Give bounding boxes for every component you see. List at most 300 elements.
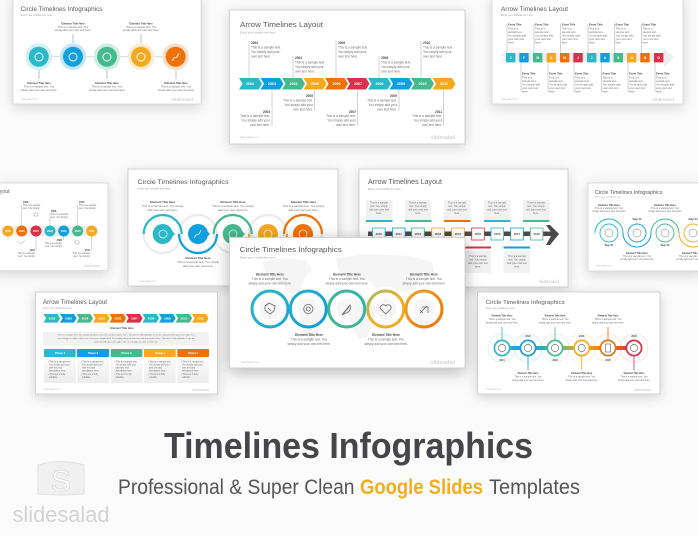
note text above: add your own text — [526, 208, 546, 212]
events below: You simply add — [602, 82, 621, 86]
subtitle: Enter your subtitle line here — [43, 307, 73, 310]
events above: here. — [535, 40, 541, 44]
events below: This is a — [575, 76, 586, 80]
phase lists: • This text is fully — [81, 373, 99, 376]
step labels: Step 03 — [661, 244, 670, 247]
events below: You simply add — [522, 82, 541, 86]
step labels: simply add your own text here — [620, 258, 654, 261]
events above: sample text. — [589, 30, 604, 34]
month tiles: N — [644, 56, 647, 60]
ribbon labels: This is a sample text. You simply — [177, 260, 219, 264]
year tiles: 2013 — [435, 232, 442, 236]
phase lists: editable. — [149, 376, 158, 379]
element labels: Element Title Here — [333, 272, 361, 276]
events above: here. — [642, 40, 649, 44]
events above: sample text. — [642, 30, 657, 34]
ribbon labels: This is a sample text. You simply — [142, 204, 184, 208]
ribbon labels: This is a sample text. You simply — [283, 204, 325, 208]
year notes: 2006 — [23, 201, 29, 204]
node labels: Element Title Here — [518, 372, 539, 375]
phase lists: You simply add your — [182, 364, 203, 366]
labels: Element Title Here — [129, 22, 153, 26]
watermark: slidesalad — [84, 264, 100, 268]
note boxes below — [465, 246, 530, 273]
year notes: 2010 — [79, 201, 85, 204]
callouts below: This is a sample text. — [412, 114, 442, 118]
ribbon labels: add your own text here. — [183, 264, 213, 268]
icon discs — [260, 298, 434, 320]
events below: your own text — [602, 86, 619, 90]
events below: Event Title — [629, 72, 643, 76]
description box: This is a sample text. You simply add your own text and description here. This text is fully editable. It can be replaced with your own style. You — [58, 334, 195, 336]
watermark: slidesalad — [634, 388, 651, 392]
callouts below: You simply add your — [368, 103, 398, 107]
element labels — [248, 272, 446, 346]
subtitle: Enter your subtitle line here — [240, 256, 276, 260]
phase lists: description here. — [82, 370, 99, 372]
events below: You simply add — [575, 82, 594, 86]
phase lists: description here. — [49, 370, 66, 372]
title: Timelines Infographics — [164, 425, 533, 466]
stems — [502, 327, 634, 370]
labels — [21, 22, 194, 92]
events below: your own text — [549, 86, 565, 90]
chevron years — [44, 314, 209, 323]
panel: arrow phases slide lower left — [36, 292, 218, 394]
year tiles: 2011 — [396, 232, 402, 236]
note text above: add your own text — [369, 208, 389, 212]
month tiles: A — [604, 56, 607, 60]
heading: Arrow Timelines Layout — [43, 300, 107, 306]
element labels: This is a sample text. You — [368, 338, 404, 342]
panel: month timeline slide top right — [492, 0, 683, 104]
callouts above: This is a sample text. — [295, 60, 325, 64]
phase lists: description here. — [116, 370, 133, 372]
year notes: This is a sample — [73, 252, 91, 255]
note text above — [369, 202, 546, 215]
callouts below: 2007 — [349, 110, 356, 114]
step labels: This is a sample text. You — [595, 207, 624, 210]
element labels: simply add your own text here. — [364, 342, 408, 346]
element labels: Element Title Here — [410, 272, 438, 276]
node labels: simply add your own text here. — [618, 379, 651, 382]
labels: Element Title Here — [164, 81, 188, 85]
events above: This is a — [589, 26, 600, 30]
phase lists: own text and — [116, 366, 129, 370]
callouts below: own text here. — [422, 123, 442, 127]
ribbon labels: This is a sample text. You simply — [212, 204, 254, 208]
watermark: slidesalad — [431, 360, 455, 366]
note text below: This is a sample — [469, 255, 488, 258]
description box: can change its color or font size. Find your sample text. You simply add your own text and description here. This text is fully editable. It can be — [58, 337, 195, 340]
node labels: This is a sample text. You — [541, 318, 569, 321]
subtitle: Enter your subtitle line here — [501, 13, 533, 17]
element labels: Element Title Here — [256, 272, 284, 276]
subtitle: tagline: Google Slides — [360, 476, 483, 499]
icon: S badge: S — [51, 465, 71, 498]
stems — [507, 24, 655, 92]
heading: Arrow Timelines Layout — [368, 179, 442, 186]
ribbon labels: add your own text here. — [148, 208, 178, 212]
callouts below: own text here. — [293, 108, 313, 112]
footer: slidesalad.com — [44, 388, 60, 391]
callouts above: You simply add your — [423, 50, 453, 54]
phase lists: You simply add your — [116, 364, 136, 366]
note text below: here. — [475, 266, 481, 268]
chevron years: 2003 — [65, 316, 72, 320]
events below: your own text — [629, 86, 645, 90]
heading: Circle Timelines Infographics — [595, 190, 663, 196]
chevron years: 2005 — [311, 82, 319, 86]
node labels: simply add your own text here. — [565, 379, 598, 382]
subtitle: tagline: Templates — [489, 476, 580, 499]
phase headers: Phase 2 — [88, 351, 99, 355]
subtitle: tagline — [118, 476, 580, 499]
element labels: This is a sample text. You — [252, 277, 288, 281]
phase lists: • This is a sample text. — [181, 360, 204, 364]
events above: here. — [562, 40, 568, 44]
phase lists: • This text is fully — [148, 373, 166, 376]
note text above: here. — [415, 212, 421, 215]
callouts above — [251, 41, 453, 74]
chevron years: 2005 — [98, 316, 105, 320]
year notes: This is a sample — [79, 204, 97, 207]
phase lists: You simply add your — [82, 364, 103, 366]
callouts below: You simply add your — [327, 118, 357, 122]
node labels: This is a sample text. You — [488, 318, 516, 321]
events below: Event Title — [522, 72, 536, 76]
note text above: This is a sample — [448, 202, 467, 204]
arrow head — [546, 225, 559, 245]
events below: here. — [656, 90, 662, 94]
phase lists: description here. — [149, 370, 166, 372]
note text below: text. You simply — [469, 258, 487, 262]
element labels: Element Title Here — [295, 333, 323, 337]
note text above: text. You simply — [409, 205, 427, 208]
chevron years: 2009 — [397, 82, 405, 86]
node labels: Element Title Here — [571, 372, 593, 375]
step labels: Element Title Here — [598, 204, 620, 207]
chevron years: 2004 — [82, 316, 89, 320]
phase headers: Phase 4 — [155, 351, 166, 355]
events above: here. — [616, 40, 622, 44]
subtitle: Enter your subtitle line here — [368, 187, 401, 191]
callouts above: 2002 — [251, 41, 258, 45]
month tiles: J — [591, 56, 593, 60]
labels: This is a sample text. You — [126, 25, 157, 29]
node labels: 2026 — [631, 335, 637, 338]
note text above: here. — [533, 212, 539, 215]
element labels: This is a sample text. You — [329, 277, 365, 281]
year dots: 2011 — [89, 229, 95, 233]
events above: You simply add — [508, 34, 527, 38]
year tiles: 2015 — [475, 232, 482, 236]
year tiles: 2017 — [514, 232, 521, 236]
events above: You simply add — [535, 34, 554, 38]
callouts below: This is a sample text. — [283, 98, 313, 102]
watermark: slidesalad — [171, 97, 193, 102]
stems — [39, 34, 176, 79]
heading: Circle Timelines Infographics — [20, 7, 102, 13]
phase lists: own text and — [82, 366, 96, 370]
footer: slidesalad.com — [241, 360, 260, 364]
node labels: 2025 — [605, 359, 611, 362]
step labels: Step 04 — [689, 218, 698, 221]
panel: linked circles slide lower right — [478, 292, 660, 394]
nodes — [494, 340, 642, 356]
events below: This is a — [656, 76, 667, 80]
callouts above: You simply add your — [251, 50, 281, 54]
events above: Event Title — [589, 22, 603, 26]
note text above: text. You simply — [488, 205, 506, 208]
year notes: This is a sample — [23, 204, 41, 207]
note text above: This is a sample — [370, 202, 389, 204]
events above: your own text — [616, 37, 632, 41]
labels: simply add your own text here. — [21, 88, 57, 92]
note text above: add your own text — [408, 208, 428, 212]
subtitle: tagline: Professional & Super Clean — [118, 476, 354, 499]
events above: This is a — [535, 26, 546, 30]
footer: slidesalad.com — [486, 388, 502, 391]
callouts above: 2004 — [295, 56, 302, 60]
element labels: simply add your own text here. — [287, 342, 331, 346]
element labels: Element Title Here — [372, 333, 400, 337]
stems — [8, 205, 92, 250]
logo wordmark: slidesalad — [12, 502, 110, 527]
description box — [43, 332, 209, 346]
events below: You simply add — [629, 82, 648, 86]
subtitle: Enter your subtitle line here — [138, 186, 171, 190]
year notes: This is a sample — [45, 242, 63, 245]
note text below: text. You simply — [508, 258, 526, 262]
phase lists: editable. — [182, 376, 191, 379]
callouts above: own text here. — [251, 54, 271, 58]
note text above: This is a sample — [409, 202, 428, 204]
watermark: slidesalad — [192, 388, 209, 392]
node labels: This is a sample text. You — [514, 376, 542, 378]
element labels: simply add your own text here. — [402, 282, 446, 286]
callouts above: You simply add your — [295, 65, 325, 69]
chevron years: 2006 — [332, 82, 340, 86]
phase lists: • This is a sample text. — [114, 360, 138, 364]
events above: Event Title — [562, 22, 576, 26]
month tiles: F — [523, 56, 525, 60]
events below: This is a — [522, 76, 533, 80]
callouts above: You simply add your — [381, 65, 411, 69]
chevron years: 2009 — [164, 316, 171, 320]
year tiles: 2010 — [376, 232, 382, 236]
month tiles: S — [617, 56, 619, 60]
watermark: slidesalad — [539, 279, 559, 284]
year notes: This is a sample — [18, 252, 36, 255]
events below: This is a — [549, 76, 560, 80]
callouts below: 2005 — [306, 94, 313, 98]
band — [0, 226, 98, 236]
chevron years: 2010 — [418, 82, 426, 86]
callouts below: You simply add your — [413, 118, 443, 122]
heading: Circle Timelines Infographics — [240, 245, 342, 254]
events below: sample text. — [575, 79, 590, 83]
element labels: simply add your own text here. — [248, 282, 292, 286]
events above: You simply add — [562, 34, 580, 38]
step labels: Step 01 — [605, 244, 614, 247]
panel: ribbon circles slide centre left — [128, 169, 338, 286]
year notes: 2011 — [85, 249, 91, 252]
step labels — [592, 204, 698, 261]
events above: your own text — [508, 37, 524, 41]
year notes: text. You simply — [79, 207, 96, 210]
step labels: simply add your own text here — [592, 210, 626, 213]
chevron years: 2007 — [131, 316, 138, 320]
events above: sample text. — [508, 30, 523, 34]
connector — [502, 346, 634, 350]
footer: slidesalad.com — [139, 279, 156, 283]
element labels: This is a sample text. You — [291, 338, 327, 342]
heading: Circle Timelines Infographics — [486, 300, 565, 306]
events above: sample text. — [562, 30, 576, 34]
note text above: add your own text — [487, 208, 507, 212]
chevron years: 2011 — [440, 82, 448, 86]
events below: here. — [602, 90, 609, 94]
icon glyphs — [265, 303, 428, 315]
note text below — [468, 255, 527, 268]
callouts below: This is a sample text. — [367, 98, 397, 102]
callouts below — [240, 94, 443, 127]
callouts below: This is a sample text. — [240, 114, 270, 118]
events above: here. — [589, 40, 595, 44]
year dots: 2005 — [5, 229, 11, 233]
note text above: text. You simply — [527, 205, 545, 208]
phase lists: • This is a sample text. — [48, 360, 71, 364]
callouts below: own text here. — [250, 123, 270, 127]
chevron years: 2011 — [197, 316, 204, 320]
chevron years — [239, 78, 456, 90]
events below: your own text — [656, 86, 672, 90]
node labels: 2021 — [499, 359, 505, 362]
phase lists: editable. — [82, 376, 91, 379]
year notes: 2007 — [30, 249, 36, 252]
callouts above: own text here. — [338, 54, 358, 58]
chevron years: 2004 — [290, 82, 298, 86]
month tiles — [506, 53, 663, 62]
events above: your own text — [642, 37, 659, 41]
note boxes above — [366, 200, 550, 222]
events above: Event Title — [616, 22, 630, 26]
labels: simply add your own text here. — [55, 28, 91, 32]
panel: arrow bar slide centre right — [359, 169, 568, 287]
chevron years: 2002 — [49, 316, 56, 320]
note text below: This is a sample — [508, 255, 527, 258]
events above: sample text. — [616, 30, 630, 34]
phase lists: editable. — [49, 376, 58, 379]
callouts below: 2011 — [435, 110, 442, 114]
callouts below: This is a sample text. — [326, 114, 356, 118]
year notes — [18, 201, 97, 258]
events above: This is a — [642, 26, 653, 30]
note text above: add your own text — [447, 208, 467, 212]
description box: replaced with your own style. You can change its color or font size. — [94, 340, 159, 344]
events above — [508, 22, 661, 44]
note text above: here. — [494, 212, 500, 215]
node labels: Element Title Here — [598, 314, 619, 318]
note text above: here. — [454, 212, 460, 215]
callouts above: own text here. — [381, 70, 401, 74]
pale halos — [488, 334, 648, 362]
note text above: here. — [376, 212, 382, 215]
ribbon labels: Element Title Here — [291, 200, 316, 204]
month tiles: O — [630, 56, 633, 60]
callouts below: own text here. — [377, 108, 397, 112]
events above: Event Title — [535, 22, 549, 26]
chevron years: 2007 — [354, 82, 362, 86]
events below: here. — [629, 90, 635, 94]
wave line — [595, 219, 698, 247]
year dots — [2, 226, 97, 236]
year dots: 2007 — [33, 229, 39, 233]
events below: You simply add — [549, 82, 568, 86]
note text below: here. — [514, 266, 520, 268]
phase lists: editable. — [116, 376, 125, 379]
element labels: This is a sample text. You — [406, 277, 442, 281]
events above: your own text — [589, 37, 605, 41]
phase lists: description here. — [182, 370, 199, 372]
phase lists: • This is a sample text. — [81, 360, 104, 364]
node labels: Element Title Here — [624, 372, 645, 375]
events below: sample text. — [656, 79, 671, 83]
month tiles: A — [550, 56, 553, 60]
events below: This is a — [629, 76, 640, 80]
phase lists: • This is a sample text. — [148, 360, 171, 364]
panel: wave timeline slide right edge — [588, 183, 698, 271]
callouts below: 2009 — [390, 94, 397, 98]
ribbon labels: Element Title Here — [150, 200, 176, 204]
events above: sample text. — [535, 30, 550, 34]
year notes: text. You simply — [51, 216, 68, 219]
labels: simply add your own text here. — [158, 88, 194, 92]
events below: sample text. — [629, 79, 644, 83]
phase lists: own text and — [149, 366, 163, 370]
phase headers — [44, 349, 209, 357]
phase headers: Phase 1 — [55, 351, 66, 355]
callouts below: You simply add your — [241, 118, 271, 122]
labels: This is a sample text. You — [161, 84, 192, 88]
year notes: text. You simply — [73, 255, 91, 258]
node labels: 2024 — [579, 335, 585, 338]
step labels: This is a sample text. You — [623, 255, 652, 258]
step labels: simply add your own text here — [648, 210, 682, 213]
labels: Element Title Here — [95, 81, 119, 85]
labels: This is a sample text. You — [58, 25, 89, 29]
callouts below: own text here. — [336, 123, 356, 127]
events below: your own text — [575, 86, 591, 90]
events below: This is a — [602, 76, 613, 80]
node labels: Element Title Here — [492, 314, 513, 318]
callouts above: This is a sample text. — [338, 46, 368, 50]
events above: You simply add — [616, 34, 634, 38]
connector line — [38, 56, 176, 58]
chevron years: 2003 — [268, 82, 276, 86]
panel: circle timeline slide top left — [13, 0, 201, 104]
dark arrow — [368, 231, 552, 236]
year notes: text. You simply — [23, 207, 40, 210]
footer: slidesalad.com — [240, 135, 259, 139]
pale arrow — [500, 48, 674, 67]
callouts above: This is a sample text. — [423, 46, 453, 50]
node labels: This is a sample text. You — [568, 376, 596, 378]
callouts above: own text here. — [295, 70, 315, 74]
ribbon labels: add your own text here. — [218, 208, 248, 212]
phase lists: • This text is fully — [114, 373, 132, 376]
